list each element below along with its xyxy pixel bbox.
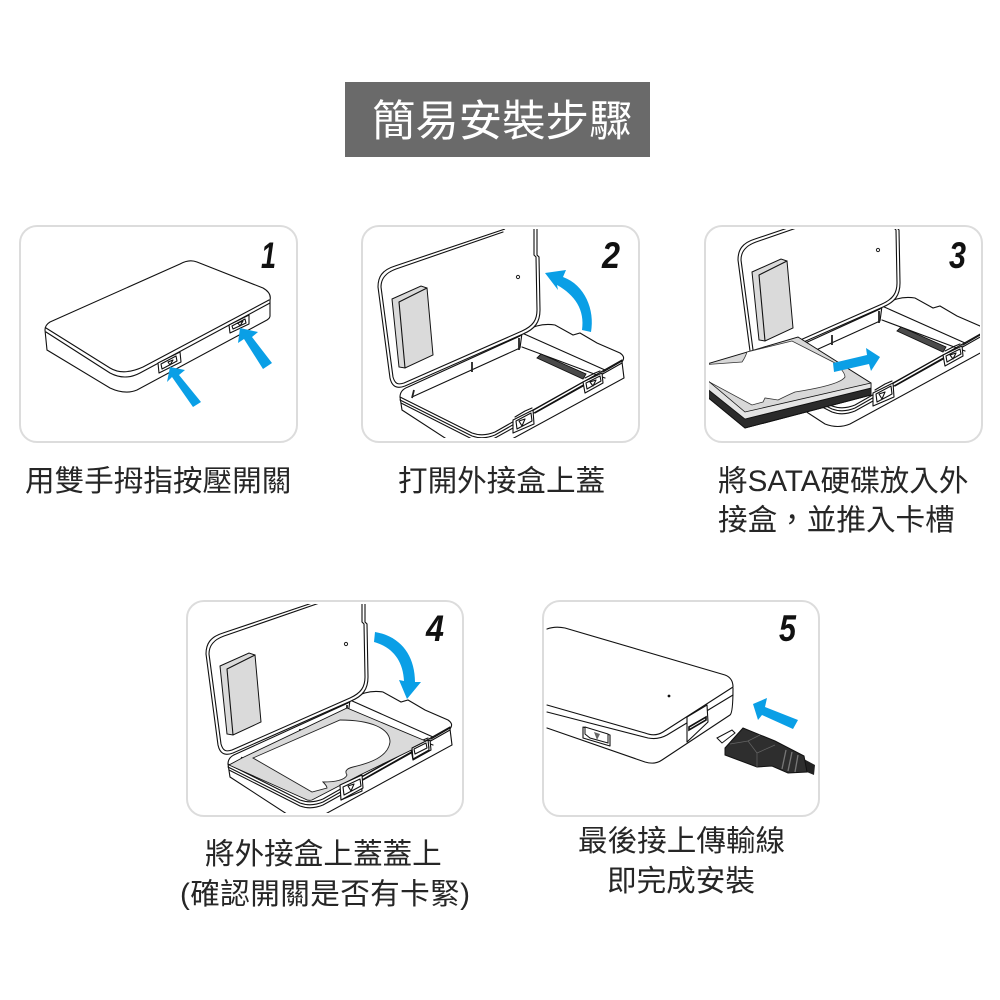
- caption 3: 將SATA硬碟放入外: [718, 465, 968, 498]
- arrow: open lid: [545, 270, 592, 332]
- caption 5: 最後接上傳輸線: [578, 825, 785, 858]
- device closed: [45, 261, 270, 392]
- panel: step 5: [543, 601, 819, 816]
- panel: step 2: [362, 226, 639, 454]
- caption 5: 即完成安裝: [607, 865, 755, 898]
- step number 2: 2: [601, 235, 620, 276]
- panel: step 1: [20, 226, 297, 442]
- arrow: press right switch: [238, 328, 272, 369]
- step number 5: 5: [779, 608, 797, 649]
- installed drive: [229, 708, 428, 800]
- arrow: insert cable: [753, 698, 798, 729]
- caption 4: 將外接盒上蓋蓋上: [205, 838, 442, 871]
- step number 3: 3: [949, 235, 966, 276]
- open case with installed drive: [206, 596, 452, 820]
- title: 簡易安裝步驟: [372, 98, 632, 146]
- caption 1: 用雙手拇指按壓開關: [25, 465, 291, 498]
- caption 4: [180, 838, 470, 911]
- caption 2: 打開外接盒上蓋: [398, 465, 605, 498]
- caption 3: 接盒，並推入卡槽: [718, 504, 955, 537]
- open case with drive: [737, 229, 980, 427]
- caption 3: [718, 465, 968, 537]
- panel: step 4: [187, 596, 463, 820]
- panel: step 3: [704, 225, 983, 443]
- caption 5: [578, 825, 785, 898]
- step number 1: 1: [261, 235, 276, 276]
- open case: [378, 229, 624, 454]
- hard drive: [700, 337, 871, 428]
- arrow: press left switch: [167, 367, 201, 407]
- caption 4: (確認開關是否有卡緊): [180, 878, 470, 911]
- arrow: push drive: [833, 348, 880, 372]
- step number 4: 4: [425, 608, 444, 649]
- arrow: close lid: [374, 632, 421, 699]
- closed case close-up: [547, 627, 815, 775]
- title: [345, 82, 650, 157]
- usb plug: [717, 728, 815, 775]
